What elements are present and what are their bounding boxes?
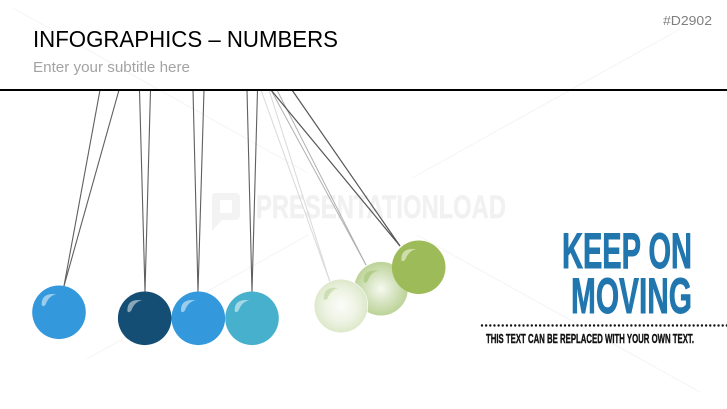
title: INFOGRAPHICS – NUMBERS: [33, 26, 338, 52]
ball 1: blue: [32, 286, 86, 339]
ball 6: mid green fading: [354, 262, 408, 316]
header rule: [0, 89, 727, 91]
ball 7: green: [392, 240, 446, 294]
callout: keep on moving: [482, 223, 727, 346]
ball 2: dark navy: [118, 292, 172, 345]
icon: watermark logo: [212, 193, 240, 231]
watermark: [212, 189, 506, 231]
document code: #D2902: [663, 13, 712, 28]
ball 4: teal: [225, 292, 279, 345]
watermark text: PRESENTATIONLOAD: [256, 189, 506, 225]
subtitle: Enter your subtitle here: [33, 60, 190, 76]
ball 5: pale green fading: [314, 279, 368, 333]
ball 3: blue: [172, 292, 225, 345]
pendulum strings: [64, 90, 400, 292]
